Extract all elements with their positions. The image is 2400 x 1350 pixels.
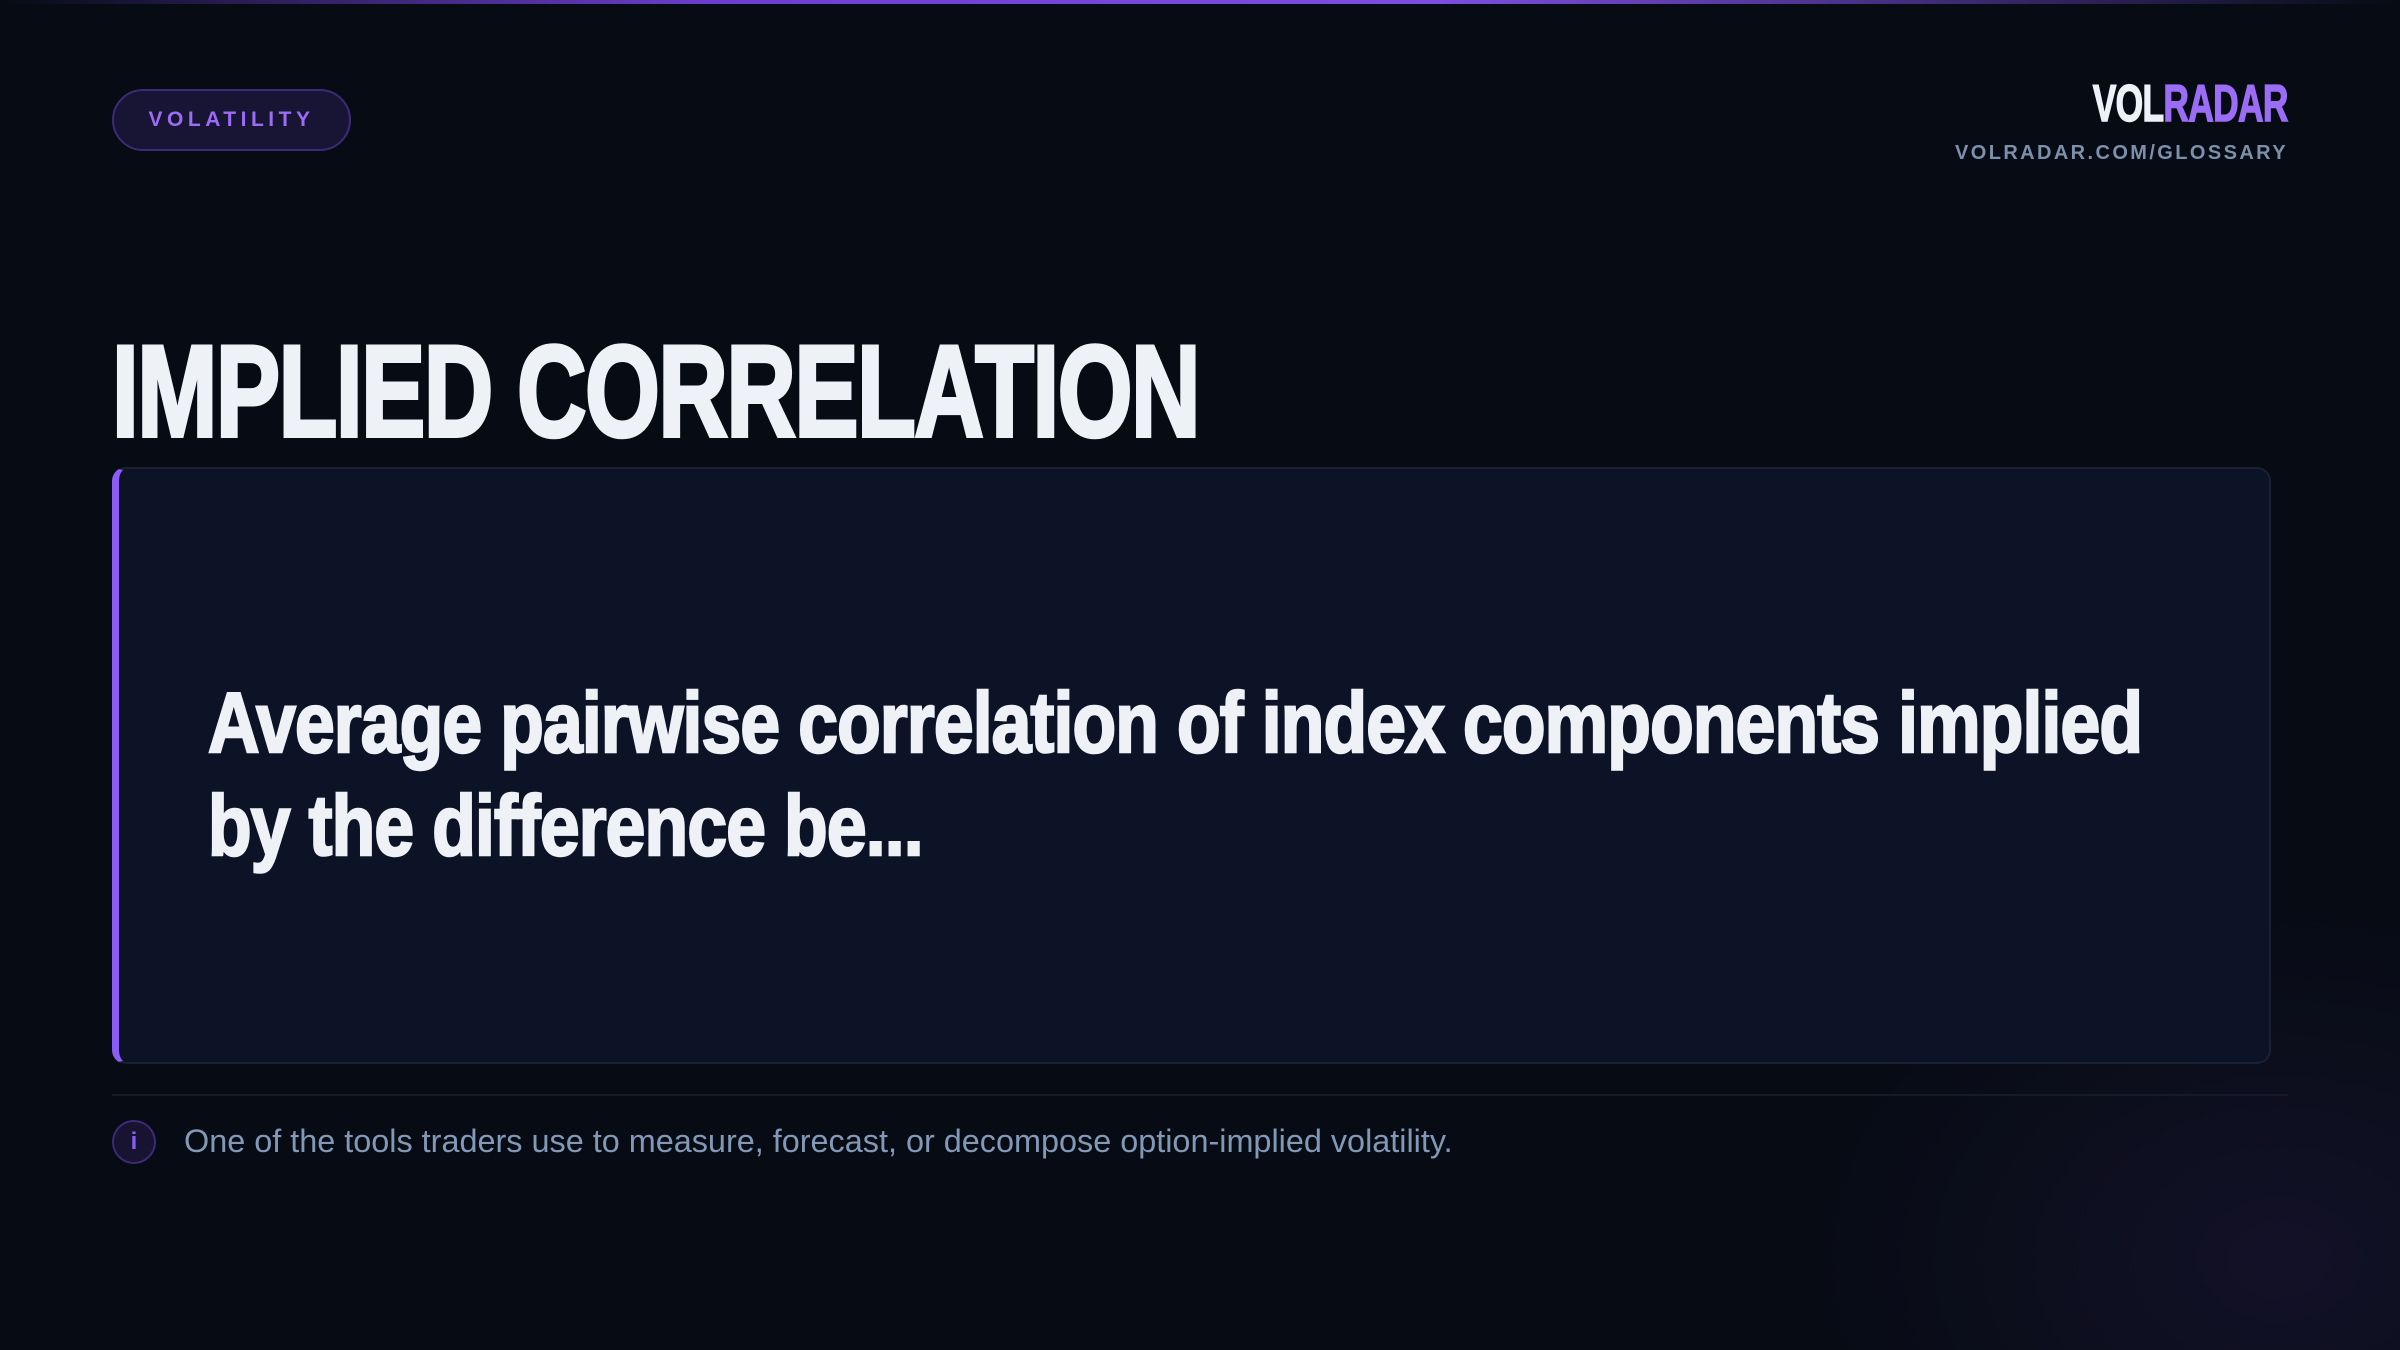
pill: category tag [112,89,351,151]
pill: category tag: VOLATILITY [149,108,314,131]
title: IMPLIED CORRELATION [112,318,1199,464]
icon: info: i [131,1128,137,1155]
definition text [208,676,2142,874]
icon: info [112,1120,156,1164]
definition text: Average pairwise correlation of index components implied [208,676,2142,771]
divider [112,1094,2288,1096]
top accent bar [0,0,2400,4]
logo url: VOLRADAR.COM/GLOSSARY [1955,142,2288,164]
corner glow [1800,900,2400,1350]
definition text: by the difference be... [208,779,923,874]
footnote text: One of the tools traders use to measure, forecast, or decompose option-implied volatility. [184,1123,1453,1159]
logo: VOLRADAR [2093,75,2288,133]
card: definition [112,467,2271,1064]
